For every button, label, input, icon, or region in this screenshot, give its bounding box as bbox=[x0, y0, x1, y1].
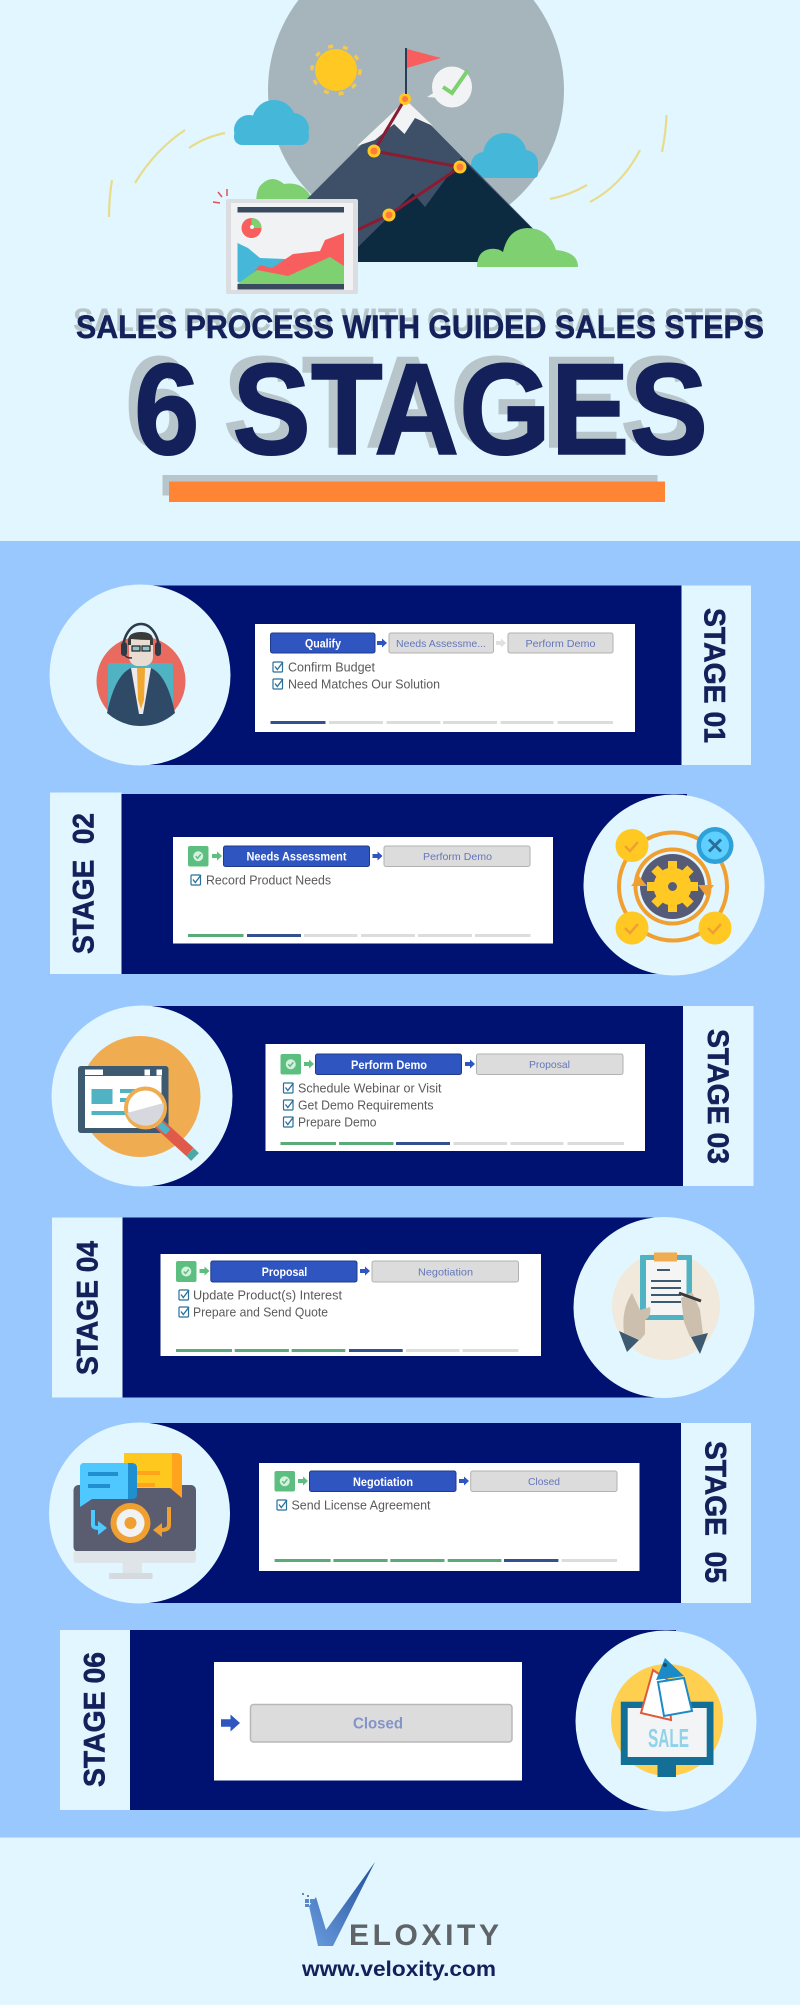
icon: monitor with chat bubbles and gear bbox=[74, 1453, 196, 1579]
stage band bbox=[142, 1006, 683, 1186]
step: Proposal: Proposal bbox=[529, 1059, 570, 1071]
step: Perform Demo bbox=[384, 846, 530, 866]
step: Proposal bbox=[476, 1054, 623, 1074]
logo mark V bbox=[309, 1862, 375, 1946]
step: Negotiation bbox=[372, 1261, 518, 1282]
stage label box bbox=[60, 1630, 130, 1810]
arrow bbox=[212, 852, 222, 860]
progress bar bbox=[275, 1559, 617, 1562]
icon circle bbox=[50, 584, 230, 766]
stage label box bbox=[683, 1006, 754, 1186]
title: 6 STAGES: 6 STAGES bbox=[134, 336, 708, 482]
CRM panel bbox=[160, 1254, 541, 1356]
checklist: Send License Agreement bbox=[292, 1498, 431, 1512]
icon: green cloud behind chart bbox=[256, 179, 315, 205]
panel: stage 05 bbox=[49, 1422, 751, 1604]
icon: sale monitor with tags bbox=[611, 1658, 723, 1777]
step: Negotiation bbox=[310, 1471, 456, 1492]
blue content background bbox=[0, 541, 800, 1838]
step: Closed bbox=[471, 1471, 617, 1492]
stage label: STAGE 06 bbox=[78, 1652, 112, 1787]
heading: subtitle: SALES PROCESS WITH GUIDED SALES STEPS bbox=[76, 309, 764, 345]
checklist: Confirm Budget bbox=[288, 660, 376, 674]
title underline bar bbox=[162, 475, 665, 502]
checklist: Schedule Webinar or Visit bbox=[298, 1082, 442, 1096]
stage label: STAGE 02 bbox=[68, 813, 100, 954]
step: Needs Assessment bbox=[224, 846, 370, 866]
stage band bbox=[140, 586, 682, 765]
stage label box bbox=[50, 792, 122, 974]
icon: browser with magnifier bbox=[78, 1036, 200, 1157]
done step bbox=[188, 846, 208, 866]
done step bbox=[280, 1054, 301, 1074]
step: Perform Demo bbox=[316, 1054, 462, 1074]
icon circle bbox=[574, 1217, 754, 1398]
icon: chart board bbox=[226, 199, 358, 294]
checklist: Prepare and Send Quote bbox=[193, 1306, 328, 1320]
icon: sun bbox=[312, 46, 360, 94]
logo wordmark: ELOXITY bbox=[349, 1919, 499, 1952]
CRM panel bbox=[173, 837, 553, 944]
step: Needs Assessment: Needs Assessme... bbox=[396, 638, 486, 650]
icon circle bbox=[52, 1006, 232, 1186]
checklist: Record Product Needs bbox=[206, 874, 331, 888]
website url: www.veloxity.com bbox=[301, 1958, 496, 1981]
CRM panel bbox=[255, 624, 635, 732]
footer background bbox=[0, 1838, 800, 2005]
icon: gear with checks bbox=[616, 827, 734, 944]
stage band bbox=[122, 1218, 664, 1398]
logo pixels bbox=[302, 1893, 314, 1907]
checklist: Prepare Demo bbox=[298, 1116, 377, 1130]
checklist: Get Demo Requirements bbox=[298, 1098, 434, 1112]
CRM panel bbox=[214, 1662, 522, 1780]
step: Negotiation: Negotiation bbox=[353, 1477, 413, 1489]
stage label box bbox=[682, 586, 751, 765]
step: Perform Demo: Perform Demo bbox=[423, 851, 492, 863]
checklist: Need Matches Our Solution bbox=[288, 678, 440, 692]
stage band bbox=[121, 794, 687, 974]
logo: Veloxity bbox=[302, 1862, 499, 1952]
stage band bbox=[140, 1423, 682, 1603]
step: Qualify: Qualify bbox=[305, 638, 342, 650]
arrow bbox=[377, 638, 387, 648]
step: Perform Demo bbox=[508, 633, 613, 653]
arrow bbox=[304, 1060, 314, 1068]
step: Needs Assessment: Needs Assessment bbox=[246, 852, 347, 864]
panel: stage 03 bbox=[52, 1006, 754, 1186]
route line bbox=[340, 99, 460, 238]
arrow bbox=[360, 1266, 370, 1276]
icon: sale monitor with tags: SALE bbox=[648, 1723, 689, 1753]
arrow bbox=[496, 638, 506, 648]
icon: clipboard in hands bbox=[612, 1252, 720, 1360]
stage label: STAGE 03 bbox=[701, 1029, 734, 1164]
grey sky circle bbox=[268, 0, 564, 238]
icon circle bbox=[576, 1630, 756, 1812]
CRM panel bbox=[259, 1463, 640, 1571]
step: Needs Assessment bbox=[389, 633, 494, 653]
step: Proposal bbox=[211, 1261, 357, 1282]
panel: stage 02 bbox=[50, 792, 764, 976]
heading: subtitle: SALES PROCESS WITH GUIDED SALES STEPS bbox=[73, 302, 764, 338]
icon: flag bbox=[405, 48, 441, 94]
stage label box bbox=[681, 1423, 751, 1603]
step: Negotiation: Negotiation bbox=[418, 1266, 473, 1278]
hero illustration: mountain with flag bbox=[109, 0, 666, 294]
arrow bbox=[221, 1714, 240, 1732]
stage band bbox=[130, 1630, 676, 1810]
panel: stage 04 bbox=[52, 1217, 754, 1398]
done step bbox=[274, 1471, 295, 1492]
icon: green cloud right bbox=[477, 228, 578, 267]
arrow bbox=[372, 852, 382, 860]
step: Perform Demo: Perform Demo bbox=[351, 1060, 427, 1072]
progress bar bbox=[280, 1142, 624, 1145]
motion dashes bbox=[109, 115, 666, 217]
step: Closed: Closed bbox=[528, 1476, 560, 1488]
arrow bbox=[298, 1476, 308, 1486]
icon: check bubble bbox=[427, 66, 472, 108]
stage label: STAGE 05 bbox=[698, 1441, 732, 1583]
icon circle bbox=[584, 794, 764, 976]
stage label: STAGE 04 bbox=[72, 1241, 104, 1375]
progress bar bbox=[188, 934, 530, 937]
mountain front bbox=[358, 158, 566, 262]
route waypoints bbox=[369, 94, 465, 220]
step: Perform Demo: Perform Demo bbox=[526, 638, 596, 650]
step: Closed bbox=[250, 1704, 512, 1742]
checklist bbox=[284, 1082, 442, 1130]
icon: chart sparks bbox=[213, 189, 227, 203]
arrow bbox=[200, 1266, 210, 1276]
progress bar bbox=[176, 1349, 518, 1352]
arrow bbox=[465, 1060, 475, 1068]
done step bbox=[176, 1261, 196, 1282]
CRM panel bbox=[266, 1044, 645, 1151]
stage label: STAGE 01 bbox=[698, 608, 730, 743]
checklist: Update Product(s) Interest bbox=[193, 1288, 343, 1302]
checklist bbox=[179, 1288, 343, 1320]
panel: stage 06 bbox=[60, 1630, 756, 1812]
arrow bbox=[459, 1476, 469, 1486]
icon: blue cloud right bbox=[471, 133, 538, 178]
step: Closed: Closed bbox=[353, 1716, 403, 1732]
icon: salesman with headset bbox=[96, 624, 186, 726]
mountain back bbox=[244, 100, 566, 262]
icon circle bbox=[49, 1422, 230, 1604]
panel: stage 01 bbox=[50, 584, 751, 766]
top background bbox=[0, 0, 800, 541]
step: Qualify bbox=[270, 633, 375, 653]
step: Proposal: Proposal bbox=[262, 1267, 307, 1279]
icon: blue cloud left bbox=[234, 100, 309, 145]
snow cap bbox=[357, 100, 433, 146]
title: 6 STAGES: 6 STAGES bbox=[125, 329, 699, 475]
checklist bbox=[273, 660, 440, 692]
progress bar bbox=[270, 721, 613, 724]
stage label box bbox=[52, 1218, 122, 1398]
